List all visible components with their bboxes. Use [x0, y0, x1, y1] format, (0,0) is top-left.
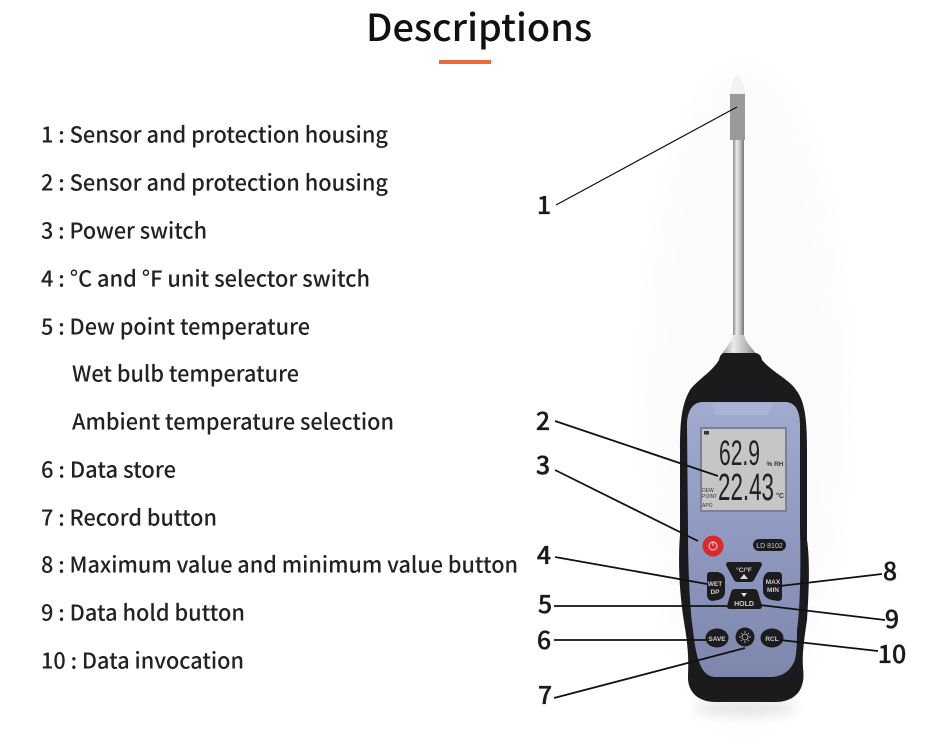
max min button: [763, 572, 782, 601]
description list: [41, 118, 518, 676]
callout 10: 10: [878, 635, 906, 671]
lcd screen: 62.9: [719, 434, 760, 473]
callout 3: [536, 446, 698, 541]
rcl button: RCL: [765, 636, 779, 643]
description list: 5 : Dew point temperature: [41, 310, 310, 342]
lcd screen: 22.43: [718, 467, 774, 509]
lcd screen: POINT: [702, 494, 717, 500]
description list: Ambient temperature selection: [72, 404, 394, 436]
description list: 2 : Sensor and protection housing: [41, 166, 388, 198]
device: thermo-hygrometer: [650, 70, 840, 730]
wet dew point button: WET: [708, 581, 722, 588]
probe collar: [720, 335, 758, 356]
blue face panel: [687, 402, 800, 677]
description list: 1 : Sensor and protection housing: [41, 118, 388, 150]
callout 8: 8: [883, 552, 897, 588]
description list: 7 : Record button: [41, 500, 217, 532]
probe tip: [731, 76, 745, 94]
backlight button: [736, 628, 754, 646]
probe sensor housing: [730, 94, 745, 140]
save button: SAVE: [708, 636, 726, 643]
callout 4: [537, 536, 707, 584]
unit button: °C/°F: [736, 566, 752, 574]
description list: 6 : Data store: [41, 452, 176, 484]
callout 7: [538, 648, 745, 712]
lcd screen: APO: [702, 503, 713, 509]
lcd screen: [700, 427, 787, 512]
callout 9: [760, 600, 899, 636]
callout 9: 9: [885, 600, 899, 636]
callout 1: 1: [537, 186, 551, 222]
description list: 3 : Power switch: [41, 214, 207, 246]
probe shaft: [733, 140, 744, 337]
callout 7: 7: [538, 676, 552, 712]
callout 2: [536, 402, 718, 476]
description list: 10 : Data invocation: [41, 644, 244, 676]
max min button: MAX: [766, 579, 781, 586]
panel highlight: [712, 403, 772, 415]
wet dew point button: DP: [710, 589, 720, 596]
callout 1: [537, 107, 737, 222]
model badge: [753, 539, 786, 551]
description list: 8 : Maximum value and minimum value button: [41, 548, 518, 580]
meter body: [679, 353, 809, 702]
rcl button: [760, 628, 784, 648]
callout 5: 5: [538, 585, 552, 621]
lcd screen: DEW: [702, 488, 714, 494]
callout 10: [780, 635, 906, 671]
callout 6: 6: [537, 621, 551, 657]
hold button: [727, 589, 762, 609]
lcd screen: % RH: [767, 461, 784, 468]
hold button: HOLD: [734, 601, 754, 608]
callout 2: 2: [536, 402, 550, 438]
callout 8: [780, 552, 897, 588]
save button: [706, 628, 728, 648]
callout 4: 4: [537, 536, 551, 572]
max min button: MIN: [767, 587, 779, 594]
unit button: [726, 562, 762, 582]
description list: Wet bulb temperature: [72, 356, 299, 388]
wet dew point button: [707, 572, 725, 601]
lcd screen: °C: [776, 492, 784, 500]
power button: [702, 536, 724, 556]
description list: 4 : °C and °F unit selector switch: [41, 262, 370, 294]
description list: 9 : Data hold button: [41, 596, 245, 628]
model badge: LD 8102: [756, 543, 783, 550]
callout 3: 3: [536, 446, 550, 482]
